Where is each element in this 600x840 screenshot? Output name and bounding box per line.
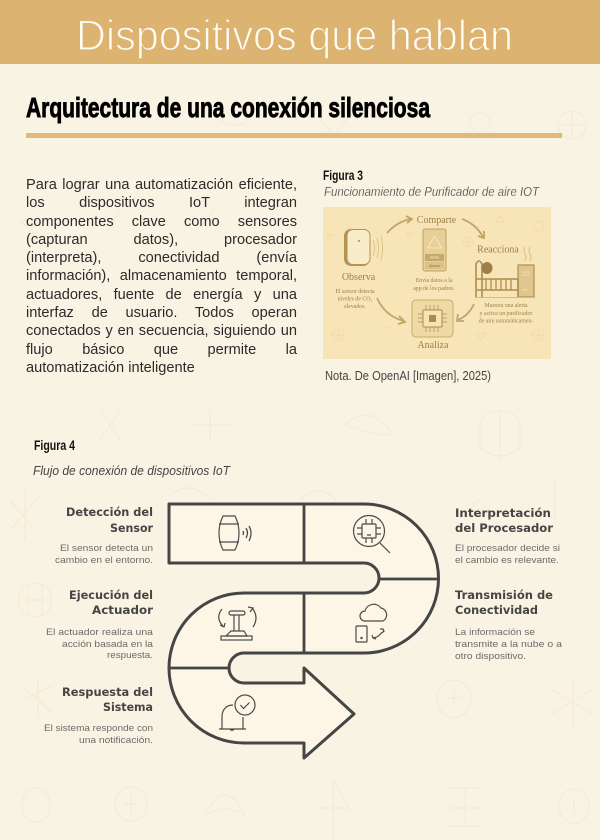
icon: actuator	[219, 607, 256, 640]
step: Transmisión de Conectividad: transmite a la nube o a	[455, 639, 563, 650]
body paragraph: (interpreta), conectividad (envía	[26, 250, 297, 266]
phone	[423, 229, 446, 271]
step: Detección del Sensor: Sensor	[110, 521, 153, 535]
title: Dispositivos que hablan	[76, 12, 513, 60]
step: Detección del Sensor: El sensor detecta un	[60, 543, 153, 554]
step: Respuesta del Sistema	[44, 685, 153, 746]
icon: processor with magnifier	[354, 516, 390, 553]
figure 3 labels: de aire automáticamen-	[479, 318, 533, 324]
figure 3 labels: Envía datos a la	[416, 278, 453, 284]
step: Interpretación del Procesador	[455, 506, 560, 566]
step: Ejecución del Actuador: respuesta.	[107, 650, 153, 661]
figure 3 labels: Reacciona	[477, 244, 519, 256]
step: Ejecución del Actuador: acción basada en la	[62, 639, 154, 650]
step: Respuesta del Sistema: una notificación.	[79, 735, 153, 746]
step: Transmisión de Conectividad	[455, 588, 563, 662]
figure 3 label: Figura 3	[323, 167, 363, 183]
figure 3 labels: elevados.	[344, 304, 366, 310]
phone: Alertas	[429, 264, 440, 268]
body paragraph: automatización inteligente	[26, 360, 195, 376]
figure 3 labels: Muestra una alerta	[484, 303, 528, 309]
step: Interpretación del Procesador: del Procesador	[455, 521, 553, 535]
figure 3 labels: Analiza	[417, 340, 449, 351]
figure 3 labels: El sensor detecta	[335, 289, 375, 295]
sensor device	[344, 229, 382, 266]
step: Detección del Sensor: Detección del	[66, 505, 153, 519]
figure 4 label: Figura 4	[34, 437, 75, 453]
step: Transmisión de Conectividad: otro dispositivo.	[455, 651, 526, 662]
step: Ejecución del Actuador	[46, 588, 154, 661]
step: Transmisión de Conectividad: La información se	[455, 627, 535, 638]
step: Respuesta del Sistema: Respuesta del	[62, 685, 153, 699]
figure 4 caption: Flujo de conexión de dispositivos IoT	[33, 464, 231, 478]
step: Detección del Sensor: cambio en el entorno.	[55, 555, 153, 566]
figure 3 caption: Funcionamiento de Purificador de aire IOT	[324, 184, 540, 199]
heading rule	[26, 133, 562, 138]
body paragraph	[26, 177, 297, 376]
step: Transmisión de Conectividad: Transmisión de	[455, 588, 553, 602]
figure 3 labels: y activa un purificador	[480, 310, 532, 317]
step: Ejecución del Actuador: El actuador realiza una	[46, 627, 154, 638]
body paragraph: flujo básico que permite la	[26, 342, 297, 358]
icon: cloud and phone	[356, 604, 387, 642]
icon: bell with check	[219, 695, 255, 730]
crib and purifier	[475, 247, 535, 298]
cycle arrows	[377, 216, 484, 324]
figure 3 labels: Observa	[342, 272, 376, 283]
chip	[412, 300, 453, 337]
figure 3 image: purifier cycle	[323, 207, 551, 359]
icon: sensor	[219, 516, 251, 550]
figure 3 labels	[335, 215, 533, 351]
step: Respuesta del Sistema: Sistema	[103, 700, 153, 714]
step: Detección del Sensor	[55, 505, 153, 566]
figure 3 labels: niveles de CO₂	[338, 296, 372, 302]
body paragraph: actuadores, fuente de energía y una	[26, 287, 297, 303]
flow diagram: serpentine arrow	[169, 504, 438, 758]
step: Ejecución del Actuador: Actuador	[92, 603, 153, 617]
figure 3 labels: Comparte	[417, 215, 457, 226]
body paragraph: componentes clave como sensores	[26, 214, 297, 230]
body paragraph: interfaz de usuario. Todos operan	[26, 305, 297, 321]
section heading: Arquitectura de una conexión silenciosa	[26, 92, 430, 123]
figure 3 note: Nota. De OpenAI [Imagen], 2025)	[325, 369, 491, 383]
body paragraph: Para lograr una automatización eficiente,	[26, 177, 297, 193]
step: Interpretación del Procesador: El procesador decide si	[455, 543, 560, 554]
step: Ejecución del Actuador: Ejecución del	[69, 588, 153, 602]
body paragraph: (capturan datos), procesador	[26, 232, 297, 248]
body paragraph: conectados y en secuencia, siguiendo un	[26, 323, 297, 339]
phone: Alerta	[430, 256, 439, 260]
body paragraph: información), almacenamiento temporal,	[26, 268, 297, 284]
step: Interpretación del Procesador: el cambio es relevante.	[455, 555, 559, 566]
step: Transmisión de Conectividad: Conectividad	[455, 603, 538, 617]
figure 3 labels: app de los padres.	[413, 286, 455, 292]
step: Interpretación del Procesador: Interpretación	[455, 506, 551, 520]
header band	[0, 0, 600, 64]
step: Respuesta del Sistema: El sistema responde con	[44, 723, 153, 734]
body paragraph: los dispositivos IoT integran	[26, 195, 297, 211]
